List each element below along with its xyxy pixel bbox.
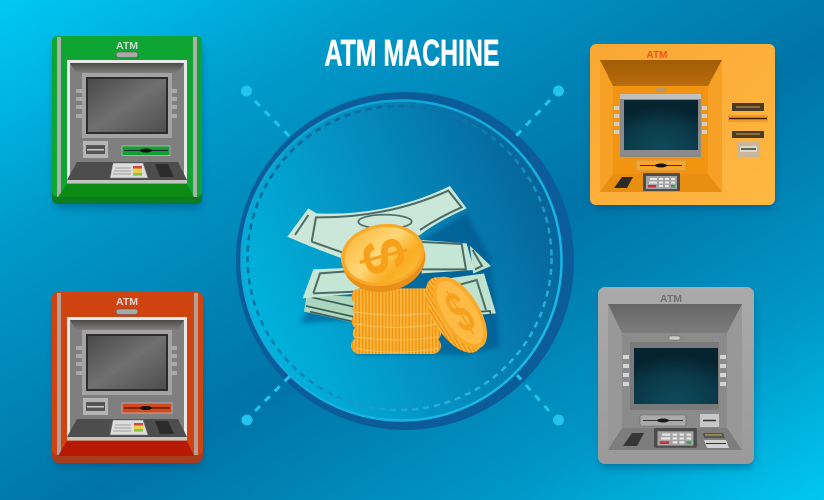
ATM label: ATM: [660, 293, 682, 305]
keypad: [654, 428, 697, 448]
coin stack: [351, 288, 441, 354]
connector: top right: [514, 86, 564, 138]
ATM label: ATM: [116, 296, 138, 308]
banknote: lower stack left: [303, 267, 360, 323]
card reader: [700, 414, 719, 427]
cash slot: [122, 146, 170, 156]
ATM: grey: [598, 287, 754, 468]
screen: [630, 342, 719, 410]
ATM: red: [52, 292, 203, 466]
receipt slots: [703, 433, 729, 448]
cash slot: [637, 161, 685, 170]
connector: bottom left: [242, 376, 290, 426]
keypad keys: [134, 423, 143, 432]
leaning coin: $: [435, 279, 486, 347]
right side slots: [728, 103, 768, 157]
ATM: green: [52, 36, 202, 208]
keypad: [643, 173, 680, 191]
cash slot: [122, 403, 172, 413]
keypad keys: [133, 166, 142, 176]
connector: bottom right: [517, 375, 564, 426]
banknote: back right: [422, 240, 491, 273]
money and coins: [287, 186, 500, 362]
banknote: top: [287, 186, 467, 260]
cash slot: [640, 415, 686, 426]
central circle: [236, 92, 574, 430]
ATM label: ATM: [647, 50, 667, 61]
ATM: orange: [590, 44, 775, 209]
connector: top left: [241, 86, 291, 138]
banknote: lower stack right: [437, 273, 496, 317]
ATM label: ATM: [116, 40, 138, 52]
leaning coin: [414, 268, 498, 362]
top coin: $: [347, 231, 420, 281]
top coin: [336, 218, 431, 298]
title: ATM MACHINE: [324, 32, 500, 74]
shadow under money: [300, 213, 500, 355]
screen: [620, 94, 701, 157]
